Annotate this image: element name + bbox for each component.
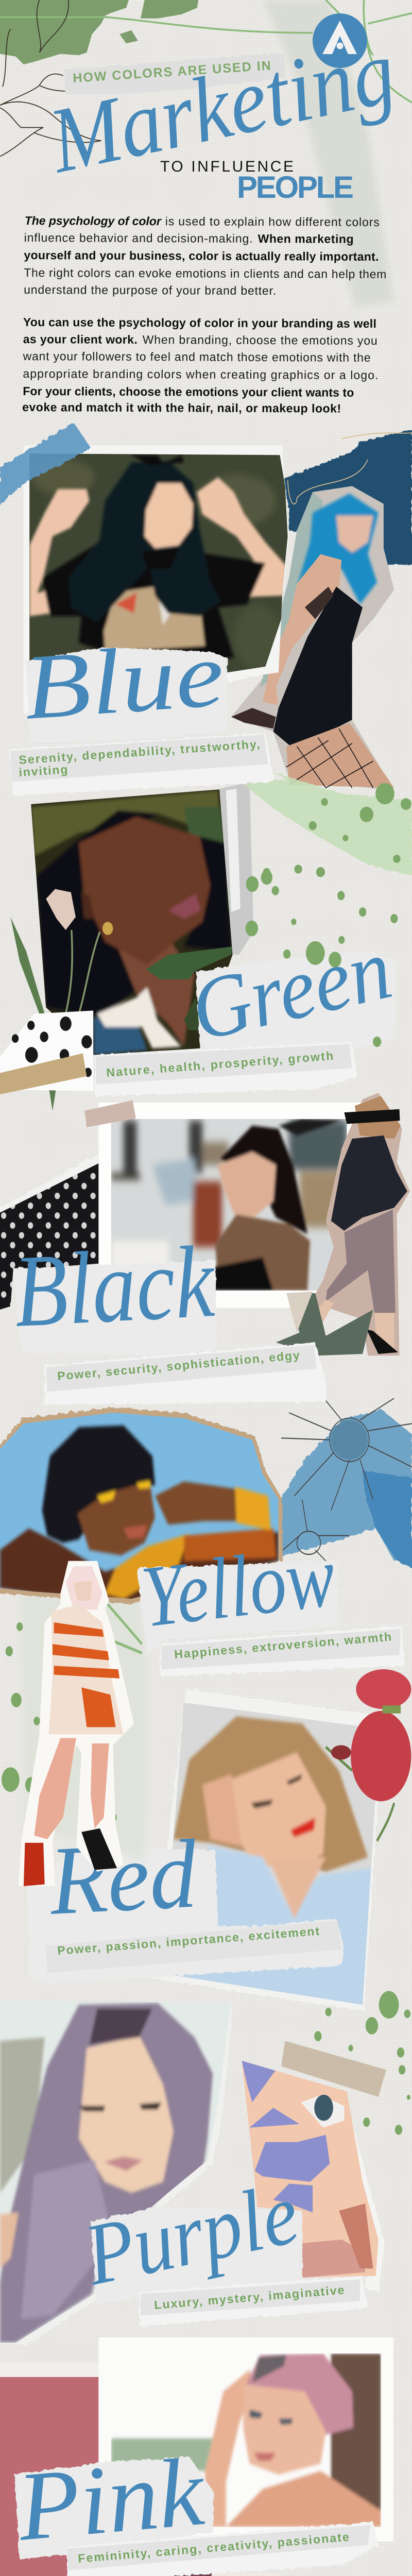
polka dot torn paper xyxy=(0,1154,98,1310)
intro paragraphs: as your client work. xyxy=(23,332,138,346)
label paper xyxy=(91,2207,368,2327)
subtitle emphasis: PEOPLE xyxy=(237,170,354,205)
intro paragraphs: You can use the psychology of color in your branding as well xyxy=(23,315,376,330)
heading: Pink: Pink xyxy=(12,2437,210,2562)
intro paragraphs: want your followers to feel and match those emotions with the xyxy=(23,349,371,364)
panel: blue xyxy=(0,422,412,877)
tagline: Nature, health, prosperity, growth xyxy=(106,1049,334,1079)
blue hair woman cutout xyxy=(231,486,394,791)
intro paragraphs: When branding, choose the emotions you xyxy=(143,333,377,347)
heading: Green: Green xyxy=(182,920,400,1059)
label paper xyxy=(28,1846,344,1984)
blue brush stroke xyxy=(0,422,91,506)
green splatter xyxy=(314,1991,410,2135)
tagline: Happiness, extroversion, warmth xyxy=(174,1630,392,1661)
heading: Blue: Blue xyxy=(21,622,227,739)
polka dot paper and kraft tape xyxy=(0,1010,93,1094)
heading: Purple: Purple xyxy=(77,2164,306,2303)
intro paragraphs: For your clients, choose the emotions your client wants to xyxy=(23,384,354,399)
icon: tulip xyxy=(10,889,100,1111)
label paper xyxy=(95,941,397,1096)
panel: red xyxy=(28,1669,411,2011)
green line art xyxy=(0,0,412,103)
heading: Red: Red xyxy=(46,1820,200,1936)
brown branch line art xyxy=(0,0,101,157)
pink paint paper xyxy=(0,2363,280,2576)
pale pencil wash xyxy=(263,0,394,308)
heading: Black: Black xyxy=(11,1225,218,1349)
tagline continued: inviting xyxy=(19,762,68,779)
blue polaroid photo xyxy=(24,445,291,714)
subtitle line: TO INFLUENCE xyxy=(160,158,294,175)
intro paragraphs: The right colors can evoke emotions in clients and can help them xyxy=(24,266,386,281)
heading: Yellow: Yellow xyxy=(137,1528,340,1646)
panel: header xyxy=(0,0,412,415)
tagline: Power, security, sophistication, edgy xyxy=(57,1348,300,1383)
intro paragraphs: yourself and your business, color is actually really important. xyxy=(24,248,379,263)
navy watercolor xyxy=(284,430,412,565)
intro paragraphs: influence behavior and decision-making. xyxy=(24,231,253,245)
title band xyxy=(64,53,285,95)
pink photo xyxy=(98,2337,393,2541)
panel: pink xyxy=(0,2337,393,2576)
purple petals eye scrap xyxy=(236,2041,386,2292)
eyebrow title: HOW COLORS ARE USED IN xyxy=(73,58,271,86)
fashion cutout figure xyxy=(19,1561,134,1886)
intro paragraphs: evoke and match it with the hair, nail, or makeup look! xyxy=(22,400,341,415)
label paper xyxy=(13,1260,326,1405)
intro paragraphs: When marketing xyxy=(258,232,354,246)
label paper xyxy=(9,647,274,795)
intro paragraphs xyxy=(22,214,387,415)
pale green stroke and splatter xyxy=(2,1590,147,1861)
intro paragraphs: appropriate branding colors when creating graphics or a logo. xyxy=(23,367,379,382)
tagline: Luxury, mystery, imaginative xyxy=(153,2283,345,2312)
tagline: Serenity, dependability, trustworthy, xyxy=(19,737,260,767)
intro paragraphs: The psychology of color xyxy=(25,214,162,228)
botanical sprig xyxy=(276,1292,373,1355)
washi tape xyxy=(84,1100,136,1127)
green splatter xyxy=(246,870,398,944)
icon: red roses xyxy=(326,1669,411,1841)
tagline: Power, passion, importance, excitement xyxy=(57,1924,320,1957)
label paper xyxy=(14,2456,379,2576)
tagline: Femininity, caring, creativity, passionate xyxy=(77,2530,350,2565)
panel: yellow xyxy=(0,1391,412,1886)
yellow photo with gold torn edge xyxy=(0,1405,284,1604)
walking figure cutout xyxy=(297,1093,410,1355)
panel: purple xyxy=(0,1991,410,2345)
intro paragraphs: understand the purpose of your brand better. xyxy=(24,283,276,297)
panel: green xyxy=(0,782,400,1111)
green photo with foil xyxy=(29,782,253,1057)
purple photo xyxy=(0,1997,234,2345)
green watercolor blob xyxy=(0,0,198,64)
black photo in white frame xyxy=(98,1103,367,1308)
red photo on torn note paper xyxy=(151,1689,384,2011)
flower illustration and blue wash xyxy=(279,1391,412,1568)
icon: institute logo xyxy=(313,13,367,68)
label paper xyxy=(136,1561,405,1676)
panel: black xyxy=(0,1093,410,1405)
green brush stroke and splatter xyxy=(244,762,412,877)
intro paragraphs: is used to explain how different colors xyxy=(165,214,380,229)
